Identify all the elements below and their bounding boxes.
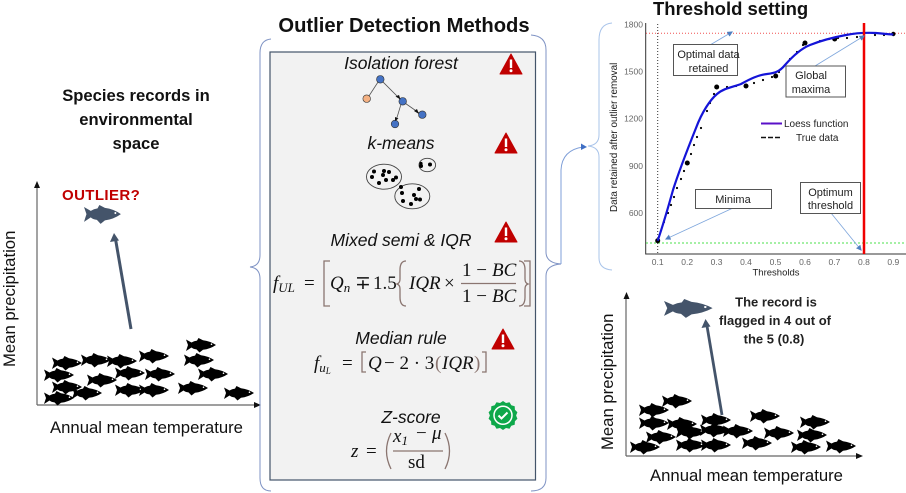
formula: z-score: x <box>393 426 401 447</box>
heading: species records <box>62 86 210 153</box>
formula: z-score <box>350 423 450 473</box>
label: mixed semi and IQR: Mixed semi & IQR <box>330 230 472 250</box>
connector between methods and threshold <box>561 144 587 264</box>
flagged note <box>719 294 832 346</box>
y axis label: Mean precipitation <box>598 314 617 450</box>
panel: species scatter <box>0 181 261 437</box>
formula: median rule: ( <box>435 353 441 374</box>
icon: warning median <box>492 329 514 349</box>
formula: z-score: μ <box>431 423 442 444</box>
formula: mixed semi and IQR: Q <box>330 273 344 294</box>
formula: mixed semi and IQR: 1 − <box>462 260 487 281</box>
flagged note: flagged in 4 out of <box>719 313 832 328</box>
x tick labels: 0.6 <box>799 257 811 267</box>
y tick labels: 1500 <box>624 66 643 76</box>
left chart axes <box>34 181 261 408</box>
callout: global maxima: Global <box>795 70 827 82</box>
heading: outlier detection methods: Outlier Detection Methods <box>278 15 530 37</box>
x tick labels: 0.7 <box>828 257 841 267</box>
icon: verified badge <box>489 401 517 430</box>
formula: median rule: = <box>342 353 353 374</box>
formula: median rule: ) <box>474 353 480 374</box>
formula: z-score: z <box>350 441 359 462</box>
formula: mixed semi and IQR <box>273 260 530 307</box>
arrow to outlier <box>110 233 131 329</box>
callout: optimal data retained: Optimal data <box>677 49 741 61</box>
formula: median rule: u <box>319 360 326 375</box>
callout: optimum threshold: Optimum <box>808 187 853 199</box>
legend: Loess function <box>784 119 848 130</box>
formula: mixed semi and IQR: f <box>273 273 278 294</box>
flagged note: the 5 (0.8) <box>744 332 804 346</box>
callout: optimal data retained <box>674 32 741 76</box>
callout: optimal data retained: retained <box>689 63 728 75</box>
x axis label: Annual mean temperature <box>50 418 243 437</box>
reference lines <box>646 24 906 254</box>
y tick labels: 600 <box>629 208 643 218</box>
formula: median rule: L <box>325 366 331 376</box>
icon: warning isolation forest <box>500 54 522 74</box>
formula: z-score: − <box>416 423 427 444</box>
label: z-score: Z-score <box>380 407 441 427</box>
formula: mixed semi and IQR: UL <box>278 280 295 295</box>
x axis label: Annual mean temperature <box>650 466 843 485</box>
formula: mixed semi and IQR: × <box>444 273 455 294</box>
formula: mixed semi and IQR: BC <box>492 260 517 281</box>
label: isolation forest: Isolation forest <box>344 53 459 73</box>
arrow to flagged fish <box>702 319 722 415</box>
x tick labels: 0.5 <box>770 257 782 267</box>
label: k-means: k-means <box>367 133 435 153</box>
formula: z-score: = <box>366 441 377 462</box>
outlier fish <box>84 205 121 224</box>
callout: optimum threshold <box>800 182 861 250</box>
flagged fish <box>664 299 713 318</box>
fish records <box>44 338 254 406</box>
callout: optimum threshold: threshold <box>808 200 853 212</box>
callout: minima <box>666 190 772 239</box>
icon: decision tree <box>363 76 426 128</box>
panel: methods <box>270 52 536 480</box>
formula: z-score: sd <box>408 452 425 473</box>
heading: species records: space <box>112 134 160 153</box>
y tick labels <box>624 20 643 218</box>
y tick labels: 1200 <box>624 114 643 124</box>
flagged note: The record is <box>735 294 817 310</box>
chart axes <box>646 23 906 254</box>
icon: warning mixed <box>495 222 517 242</box>
callout: global maxima <box>786 36 864 97</box>
fish records <box>630 394 856 454</box>
outlier label: OUTLIER? <box>62 187 140 204</box>
heading: species records: environmental <box>79 110 193 129</box>
chart: threshold line chart <box>609 20 906 278</box>
x axis title: Thresholds <box>752 268 800 278</box>
label: median rule: Median rule <box>355 328 447 348</box>
formula: mixed semi and IQR: = <box>304 273 315 294</box>
y axis title: Data retained after outlier removal <box>609 63 620 212</box>
formula: mixed semi and IQR: 1.5 <box>373 273 397 294</box>
x tick labels: 0.1 <box>652 257 664 267</box>
optimum threshold line <box>863 23 865 254</box>
y tick labels: 1800 <box>624 20 643 30</box>
x tick labels: 0.8 <box>858 257 870 267</box>
x tick labels <box>652 257 899 267</box>
panel: flagged record scatter <box>598 292 863 485</box>
heading: species records: Species records in <box>62 86 210 105</box>
formula: mixed semi and IQR: BC <box>492 286 517 307</box>
x tick labels: 0.3 <box>711 257 723 267</box>
y tick labels: 900 <box>629 161 643 171</box>
true data points <box>655 32 896 243</box>
formula: mixed semi and IQR: 1 − <box>462 286 487 307</box>
callout: global maxima: maxima <box>792 84 831 96</box>
formula: mixed semi and IQR: ∓ <box>355 273 371 294</box>
x tick labels: 0.9 <box>887 257 899 267</box>
brace around threshold chart <box>588 23 612 270</box>
formula: mixed semi and IQR: IQR <box>408 273 441 294</box>
formula: median rule: Q <box>368 353 382 374</box>
right chart axes <box>624 292 863 459</box>
x tick labels: 0.2 <box>681 257 693 267</box>
legend: True data <box>796 133 839 144</box>
formula: z-score: 1 <box>401 433 408 448</box>
y axis label: Mean precipitation <box>0 231 19 367</box>
loess curve <box>658 33 893 241</box>
brace around methods <box>250 35 561 491</box>
callout: minima: Minima <box>715 194 752 206</box>
icon: warning k-means <box>495 133 517 153</box>
formula: mixed semi and IQR: n <box>344 280 350 295</box>
x tick labels: 0.4 <box>740 257 752 267</box>
formula: median rule: − 2 · 3 <box>384 353 434 374</box>
legend <box>761 119 848 144</box>
formula: median rule: f <box>314 353 319 374</box>
icon: clusters <box>366 158 436 209</box>
formula: median rule: IQR <box>441 353 474 374</box>
formula: median rule <box>314 352 486 376</box>
